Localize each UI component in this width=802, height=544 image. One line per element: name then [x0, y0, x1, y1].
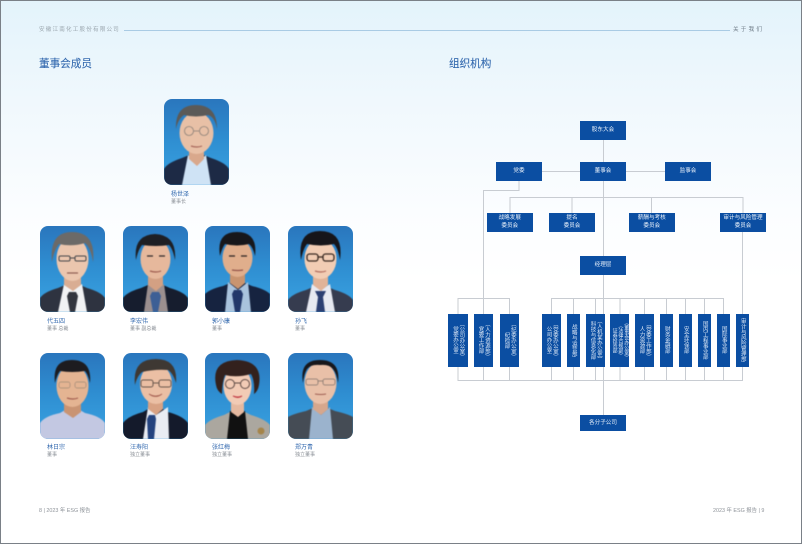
board member: 汪寿阳: 汪寿阳: [130, 444, 148, 450]
department: 国内工程事业部: 国内工程事业部: [702, 321, 708, 359]
org box: 董事会: 董事会: [595, 168, 611, 174]
board member: 郭小康: 董事: [212, 326, 222, 332]
department: 党委办公室: 党委办公室: [452, 326, 458, 354]
department: 安全环保部: [679, 314, 692, 366]
board member: 张红梅: 张红梅: [212, 444, 230, 450]
department: 党委办公室: （公司办公室）: [458, 321, 464, 359]
org box: 提名委员会: 提名: [566, 215, 578, 221]
department: 人力资源部: （党委工作部）: [645, 321, 651, 359]
department: 战略与运营部: 战略与运营部: [571, 324, 577, 356]
department: 科技与信息化部: 科技与信息化部: [590, 321, 596, 359]
org box: 监事会: 监事会: [680, 168, 696, 174]
department: 公司办公室: （党委办公室）: [552, 321, 558, 359]
org box: 党委: [496, 162, 542, 180]
board member: 孙飞: 董事: [295, 326, 305, 332]
org box: 审计与风险管理委员会: [720, 212, 766, 232]
department: 证券投资部: 证券投资部: [612, 328, 618, 352]
department: 证券投资部: （法律合规部）: [617, 322, 623, 358]
header: section name: 关于我们: [733, 26, 764, 32]
org box: 党委: 党委: [513, 168, 525, 174]
department: 财务金融部: 财务金融部: [664, 326, 670, 354]
department: 公司办公室: [542, 314, 561, 366]
department: 安全环保部: 安全环保部: [683, 326, 689, 354]
department: 人力资源部: [635, 314, 654, 366]
board member: 李宏伟: 李宏伟: [130, 318, 148, 324]
org box: 审计与风险管理委员会: 审计与风险管理: [723, 215, 763, 221]
board member: 郑万青: [288, 353, 353, 458]
org box: 战略发展委员会: [487, 212, 532, 232]
board member: 代五四: [40, 226, 105, 332]
department: 审计与风险管理部: 审计与风险管理部: [740, 318, 746, 362]
org box: 经理层: [580, 256, 626, 274]
department: 财务金融部: [660, 314, 673, 366]
department: 公司办公室: 公司办公室: [546, 326, 552, 354]
board member: 孙飞: [288, 226, 353, 332]
board member: 林日宗: 董事: [47, 452, 57, 458]
board member: 张红梅: [205, 353, 270, 458]
department: 纪检部: （纪委办公室）: [510, 321, 516, 359]
department: 证券投资部: [610, 314, 629, 366]
org box: 股东大会: [580, 120, 626, 140]
org box: 各分子公司: 各分子公司: [589, 420, 617, 426]
department: 纪检部: [500, 314, 519, 366]
board member: 李宏伟: 董事 副总裁: [130, 326, 156, 332]
org box: 提名委员会: [549, 212, 595, 232]
board member: 郭小康: 郭小康: [212, 318, 230, 324]
department: 纪检部: 纪检部: [504, 332, 510, 348]
department: 科技与信息化部: （人机某办公室）: [596, 318, 602, 362]
footer: left page number: 8 | 2023 年 ESG 报告: [39, 508, 90, 514]
org box: 战略发展委员会: 战略发展: [499, 215, 521, 221]
org box: 薪酬与考核委员会: 薪酬与考核: [638, 215, 666, 221]
department: 党委工作部: 党委工作部: [478, 326, 484, 354]
board member: 杨世泽: [164, 99, 229, 204]
header: rule line: [124, 30, 730, 31]
board member: 代五四: 董事 总裁: [47, 326, 68, 332]
org box: 各分子公司: [580, 414, 626, 430]
board member: 郑万青: 郑万青: [295, 444, 313, 450]
board member: 杨世泽: 董事长: [171, 198, 186, 204]
department: 国际事业部: [717, 314, 730, 366]
org box: 股东大会: 股东大会: [592, 127, 614, 133]
org box: 提名委员会: 委员会: [564, 223, 580, 229]
footer: right page number: 2023 年 ESG 报告 | 9: [713, 508, 764, 514]
header: company name: 安徽江南化工股份有限公司: [39, 26, 120, 32]
board member: 杨世泽: 杨世泽: [171, 192, 189, 198]
org box: 战略发展委员会: 委员会: [501, 223, 518, 229]
department: 战略与运营部: [567, 314, 580, 366]
board member: 代五四: 代五四: [47, 318, 65, 324]
board member: 郭小康: [205, 226, 270, 332]
board member: 郑万青: 独立董事: [295, 452, 315, 458]
org box: 经理层: 经理层: [595, 262, 611, 268]
department: 国内工程事业部: [698, 314, 711, 366]
org box: 监事会: [665, 162, 711, 180]
board member: 汪寿阳: 独立董事: [130, 452, 150, 458]
heading: organisation: 组织机构: [449, 58, 491, 70]
org box: 薪酬与考核委员会: 委员会: [643, 223, 660, 229]
org box: 审计与风险管理委员会: 委员会: [735, 223, 751, 229]
org box: 董事会: [580, 162, 626, 180]
board member: 林日宗: [40, 353, 105, 458]
board member: 李宏伟: [123, 226, 188, 332]
org box: 薪酬与考核委员会: [629, 212, 674, 232]
department: 国际事业部: 国际事业部: [721, 326, 727, 354]
board member: 张红梅: 独立董事: [212, 452, 232, 458]
heading: board members: 董事会成员: [39, 58, 92, 70]
board member: 汪寿阳: [123, 353, 188, 458]
department: 科技与信息化部: [586, 314, 605, 366]
board member: 孙飞: 孙飞: [295, 318, 307, 324]
department: 人力资源部: 人力资源部: [638, 326, 644, 354]
department: 证券投资部: （董事会办公室）: [623, 320, 629, 360]
department: 党委办公室: [448, 314, 468, 366]
department: 党委工作部: [474, 314, 493, 366]
department: 党委工作部: （人力资源部）: [484, 321, 490, 359]
board member: 林日宗: 林日宗: [47, 444, 65, 450]
department: 审计与风险管理部: [736, 314, 749, 366]
